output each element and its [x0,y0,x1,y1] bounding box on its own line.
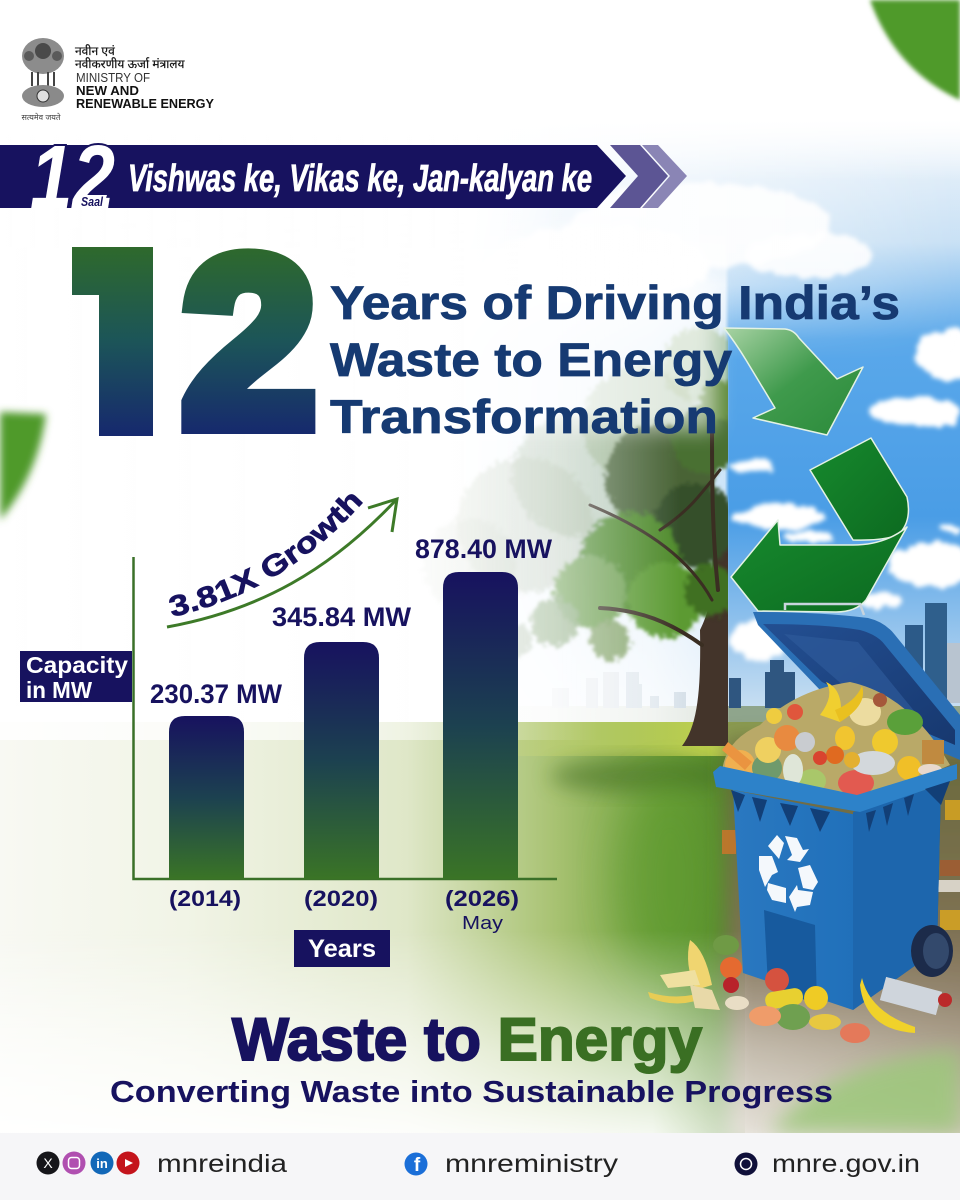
decorative leaf: bottom right [770,1050,960,1132]
background: white fade over upper sky [470,150,916,351]
heading: title: Waste to Energy [330,333,732,386]
bar 2026 [415,534,553,933]
icon: national emblem [22,38,64,107]
background: litter covered ground [722,722,960,1145]
background: bottom white fade [0,930,960,1133]
ministry name: नवीकरणीय ऊर्जा मंत्रालय [75,57,185,71]
background: top white fade [0,120,960,180]
emblem motto: सत्यमेव जयते [22,112,61,122]
bar 2026: May [462,913,503,933]
decorative leaf: left [0,412,46,520]
background: white fade beside tree [456,266,729,722]
ribbon [0,145,626,208]
background: blue sky with clouds [0,120,960,730]
icon: LinkedIn: in [96,1156,108,1171]
tree canopy [454,326,728,664]
background: solid white over far left [0,120,960,740]
background: white wash over title area [330,280,715,430]
x axis label [294,930,390,967]
heading: large 12: 1 [50,199,195,485]
bar 2026: 878.40 MW [415,534,553,564]
tree trunk [682,544,728,746]
icon: LinkedIn [90,1152,114,1174]
chart: capacity bar chart [20,494,557,967]
bar 2014 [150,679,282,911]
icon: Facebook: f [414,1155,421,1176]
bar 2020 [272,602,412,911]
bin lid [753,604,960,760]
icon: X [36,1152,60,1174]
heading: title: Transformation [330,390,718,443]
icon: website globe [734,1152,758,1176]
ministry name [75,44,214,111]
bar 2014: 230.37 MW [150,679,282,709]
arrow: right [810,438,908,540]
waste pile [722,682,950,805]
ministry name: NEW AND [76,83,139,98]
Saal: Saal [81,194,103,209]
y axis label: Capacity [26,652,128,678]
heading: title: Years of Driving India’s [330,276,900,329]
decorative leaf: top right [870,0,960,100]
bar 2026: (2026) [445,886,519,911]
bin rim [713,764,957,812]
bin body [733,785,941,1010]
heading: waste to energy: Waste to Energy [232,1006,703,1073]
subheading: Converting Waste into Sustainable Progress [110,1074,833,1109]
bin wheel [911,925,953,977]
banner: 12 Saal ribbon [0,143,687,208]
header: ministry logo [22,38,214,122]
background: grass field [0,706,745,1142]
heading: large 12: 2 [182,208,316,476]
arrow: bottom [731,520,907,612]
footer: social links [0,1133,960,1200]
icon: Facebook [404,1152,428,1176]
bar 2020: 345.84 MW [272,602,412,632]
icon: large green recycling arrows [724,328,908,612]
ministry name: RENEWABLE ENERGY [76,96,214,111]
background: distant city skyline [385,603,960,722]
bin rim notches [731,781,950,832]
icon: recycling symbol on bin [759,835,818,912]
slogan: Vishwas ke, Vikas ke, Jan-kalyan ke [128,158,592,200]
icon: X: X [43,1155,53,1171]
y axis label: in MW [26,677,92,703]
big 12: 12 [30,128,115,228]
y axis label [20,651,132,703]
footer background [0,1133,960,1200]
handle: mnreindia: mnreindia [157,1150,287,1178]
spilled fruit and banana peels [648,935,952,1043]
bin front panel [764,910,817,1005]
icon: Instagram [62,1152,86,1174]
icon: YouTube [116,1152,140,1174]
bar 2014: (2014) [169,886,241,911]
handle: mnreministry: mnreministry [445,1150,619,1178]
illustration: blue recycling bin with waste [648,604,960,1043]
ministry name: MINISTRY OF [76,70,150,85]
growth arrow: 3.81X Growth [169,494,363,616]
heading: title [330,276,900,443]
x axis label: Years [308,935,376,963]
ministry name: नवीन एवं [75,44,115,58]
arrow: top [724,328,863,435]
chevrons [610,145,668,208]
heading: large 12 [72,247,316,436]
handle: website: mnre.gov.in [772,1150,920,1178]
chart axes [134,557,557,879]
bar 2020: (2020) [304,886,378,911]
illustration: tree [454,326,728,746]
